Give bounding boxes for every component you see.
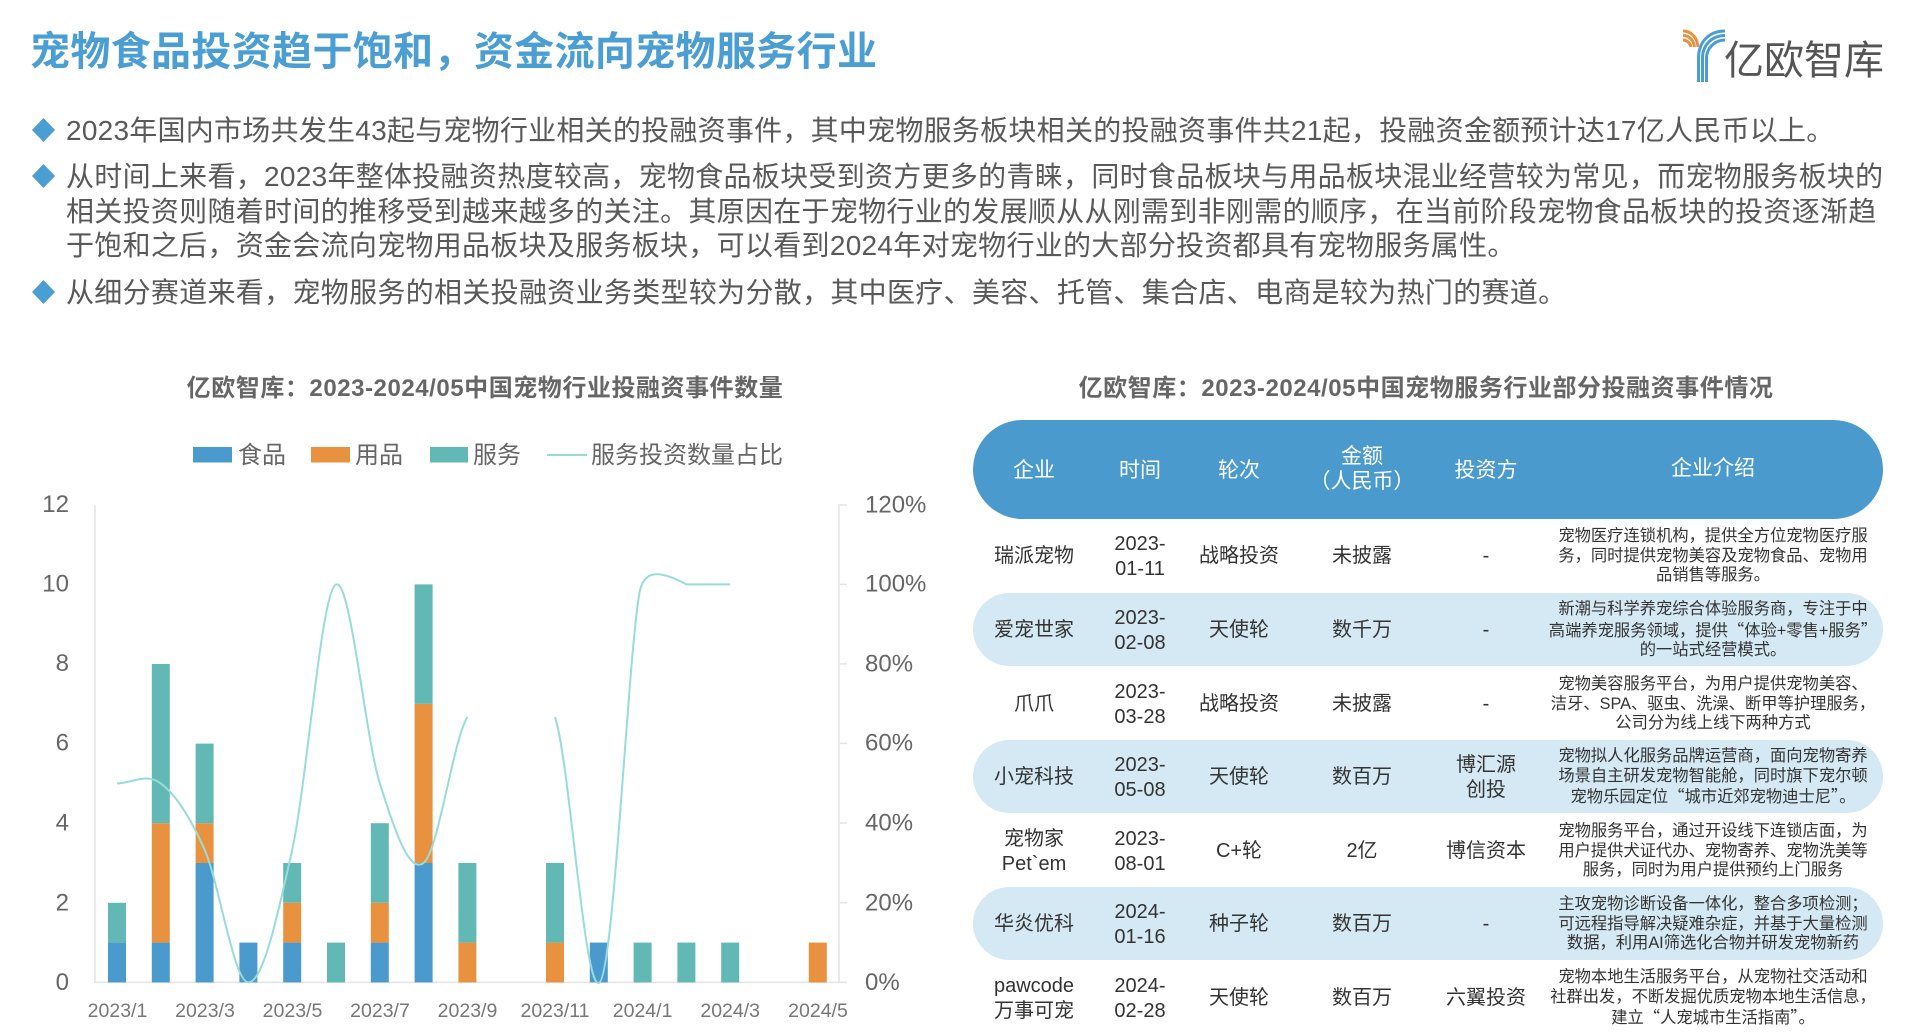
table header: 金额 bbox=[1341, 444, 1383, 468]
row: 小宠科技 bbox=[973, 740, 1883, 813]
row: pawcode 万事可宠 bbox=[994, 968, 1876, 1028]
icon: brand logo mark bbox=[1683, 30, 1725, 82]
row: 瑞派宠物 bbox=[994, 526, 1868, 584]
row: 瑞派宠物: 2023- bbox=[1114, 532, 1166, 554]
table header: （人民币） bbox=[1310, 470, 1414, 492]
x axis labels: 2024/1 bbox=[613, 1000, 672, 1022]
row: 宠物家: 博信资本 bbox=[1446, 840, 1526, 862]
bullet text 2 bbox=[66, 161, 1883, 261]
row: 华炎优科: 可远程指导解决疑难杂症，并基于大量检测 bbox=[1558, 915, 1868, 933]
table header: 轮次 bbox=[1218, 458, 1260, 482]
row: 瑞派宠物: 务，同时提供宠物美容及宠物食品、宠物用 bbox=[1558, 547, 1868, 565]
row: 爱宠世家: 数千万 bbox=[1332, 619, 1392, 641]
row: 爪爪: 未披露 bbox=[1332, 693, 1392, 715]
row: 华炎优科: 数据，利用AI筛选化合物并研发宠物新药 bbox=[1567, 934, 1859, 952]
chart legend: 食品 bbox=[238, 442, 286, 469]
right axis labels: 60% bbox=[865, 730, 913, 756]
row: 小宠科技: 数百万 bbox=[1332, 766, 1392, 788]
row: 宠物家: 用户提供犬证代办、宠物寄养、宠物洗美等 bbox=[1558, 842, 1868, 860]
row: 宠物家: C+轮 bbox=[1216, 840, 1262, 862]
row: pawcode 万事可宠: pawcode bbox=[994, 974, 1074, 996]
row: 爱宠世家: 新潮与科学养宠综合体验服务商，专注于中 bbox=[1558, 600, 1868, 618]
row: 爪爪: 2023- bbox=[1114, 680, 1166, 702]
row: 宠物家: 2023- bbox=[1114, 828, 1166, 850]
row: 瑞派宠物: - bbox=[1483, 545, 1489, 567]
bars: food bbox=[108, 863, 608, 982]
row: 华炎优科: 2024- bbox=[1114, 900, 1166, 922]
row: 小宠科技: 宠物乐园定位“城市近郊宠物迪士尼”。 bbox=[1570, 783, 1855, 807]
left axis labels bbox=[42, 491, 69, 996]
right axis labels: 20% bbox=[865, 890, 913, 916]
bars: supplies bbox=[152, 704, 827, 982]
left axis labels: 2 bbox=[56, 890, 69, 916]
row: pawcode 万事可宠: 万事可宠 bbox=[994, 1000, 1074, 1022]
row: 宠物家: 宠物家 bbox=[1004, 828, 1064, 850]
table header: 企业 bbox=[1013, 458, 1055, 482]
left axis labels: 6 bbox=[56, 730, 69, 756]
chart legend: 服务 bbox=[473, 442, 521, 469]
chart: monthly investment events bbox=[42, 442, 926, 1022]
left axis labels: 12 bbox=[42, 491, 69, 518]
bullet text 2: 相关投资则随着时间的推移受到越来越多的关注。其原因在于宠物行业的发展顺从从刚需到非刚需的顺序，在当前阶段宠物食品板块的投资逐渐趋 bbox=[66, 196, 1877, 226]
row: 小宠科技: 场景自主研发宠物智能舱，同时旗下宠尔顿 bbox=[1558, 767, 1868, 785]
table header bbox=[973, 420, 1883, 519]
row: 爱宠世家: 高端养宠服务领域，提供“体验+零售+服务” bbox=[1549, 617, 1877, 641]
x axis labels: 2024/3 bbox=[700, 1000, 760, 1022]
row: 爱宠世家: 的一站式经营模式。 bbox=[1640, 641, 1786, 659]
row: 爪爪: 洁牙、SPA、驱虫、洗澡、断甲等护理服务， bbox=[1551, 695, 1875, 713]
row: 宠物家 bbox=[1002, 822, 1868, 879]
x axis labels bbox=[88, 1000, 848, 1022]
row: 爪爪: - bbox=[1483, 693, 1489, 715]
right axis labels: 0% bbox=[865, 969, 900, 996]
row: 瑞派宠物: 01-11 bbox=[1115, 558, 1165, 580]
row: pawcode 万事可宠: 六翼投资 bbox=[1446, 987, 1526, 1009]
line: service share of investments bbox=[117, 574, 730, 983]
row: 华炎优科: - bbox=[1483, 913, 1489, 935]
table header: 企业介绍 bbox=[1671, 457, 1755, 480]
row: 华炎优科: 种子轮 bbox=[1209, 913, 1269, 935]
right axis labels: 100% bbox=[865, 570, 926, 598]
row: 小宠科技: 创投 bbox=[1466, 778, 1506, 800]
icon: bullet diamond 2 bbox=[32, 164, 55, 188]
row: 小宠科技: 05-08 bbox=[1114, 778, 1166, 800]
logo wordmark: 亿欧智库 bbox=[1724, 39, 1884, 83]
chart legend bbox=[193, 442, 783, 469]
table header: 投资方 bbox=[1454, 458, 1518, 482]
row: pawcode 万事可宠: 社群出发，不断发掘优质宠物本地生活信息， bbox=[1550, 988, 1876, 1006]
bullet list bbox=[32, 115, 1883, 308]
row: 宠物家: 服务，同时为用户提供预约上门服务 bbox=[1583, 861, 1843, 879]
x axis labels: 2023/7 bbox=[350, 1000, 410, 1022]
row: 小宠科技: 小宠科技 bbox=[994, 766, 1074, 788]
right axis labels: 40% bbox=[865, 810, 913, 836]
x axis labels: 2023/3 bbox=[175, 1000, 235, 1022]
bars: services bbox=[108, 584, 739, 982]
row: 爪爪: 03-28 bbox=[1114, 706, 1166, 728]
row: pawcode 万事可宠: 2024- bbox=[1114, 974, 1166, 996]
row: 宠物家: 宠物服务平台，通过开设线下连锁店面，为 bbox=[1558, 822, 1868, 840]
table header: 时间 bbox=[1119, 458, 1161, 482]
row: pawcode 万事可宠: 天使轮 bbox=[1209, 987, 1269, 1009]
bullet text 3: 从细分赛道来看，宠物服务的相关投融资业务类型较为分散，其中医疗、美容、托管、集合店、电商是较为热门的赛道。 bbox=[66, 277, 1566, 308]
row: 爪爪: 宠物美容服务平台，为用户提供宠物美容、 bbox=[1558, 675, 1868, 693]
x axis labels: 2023/1 bbox=[88, 1000, 147, 1022]
row: 小宠科技: 博汇源 bbox=[1456, 754, 1516, 776]
chart heading: 亿欧智库：2023-2024/05中国宠物行业投融资事件数量 bbox=[187, 375, 783, 402]
row: 爱宠世家: 爱宠世家 bbox=[994, 619, 1074, 641]
title: 宠物食品投资趋于饱和，资金流向宠物服务行业 bbox=[30, 30, 877, 74]
row: 华炎优科: 01-16 bbox=[1114, 926, 1166, 948]
x axis labels: 2024/5 bbox=[788, 1000, 848, 1022]
left axis labels: 4 bbox=[56, 810, 69, 836]
left axis labels: 8 bbox=[56, 650, 69, 677]
row: pawcode 万事可宠: 02-28 bbox=[1114, 1000, 1166, 1022]
chart legend: 服务投资数量占比 bbox=[591, 442, 783, 469]
right axis labels: 120% bbox=[865, 492, 926, 518]
row: 华炎优科: 华炎优科 bbox=[994, 913, 1074, 935]
row: 瑞派宠物: 宠物医疗连锁机构，提供全方位宠物医疗服 bbox=[1558, 527, 1868, 545]
bullet text 1: 2023年国内市场共发生43起与宠物行业相关的投融资事件，其中宠物服务板块相关的投融资事件共21起，投融资金额预计达17亿人民币以上。 bbox=[66, 115, 1834, 146]
row: pawcode 万事可宠: 数百万 bbox=[1332, 987, 1392, 1009]
row: 爪爪: 战略投资 bbox=[1199, 693, 1279, 715]
row: 瑞派宠物: 未披露 bbox=[1332, 545, 1392, 567]
row: 华炎优科: 数百万 bbox=[1332, 913, 1392, 935]
row: pawcode 万事可宠: 建立“人宠城市生活指南”。 bbox=[1611, 1004, 1815, 1028]
row: 瑞派宠物: 瑞派宠物 bbox=[994, 545, 1074, 567]
row: 瑞派宠物: 品销售等服务。 bbox=[1656, 566, 1770, 584]
row: 爱宠世家: 2023- bbox=[1114, 606, 1166, 628]
row: 爱宠世家 bbox=[973, 593, 1883, 666]
table heading: 亿欧智库：2023-2024/05中国宠物服务行业部分投融资事件情况 bbox=[1079, 375, 1773, 402]
row: 宠物家: 08-01 bbox=[1114, 852, 1166, 874]
chart legend: 用品 bbox=[355, 442, 403, 469]
row: 爪爪: 公司分为线上线下两种方式 bbox=[1615, 714, 1811, 732]
row: 爱宠世家: - bbox=[1483, 619, 1489, 641]
row: 爱宠世家: 02-08 bbox=[1114, 632, 1166, 654]
row: 瑞派宠物: 战略投资 bbox=[1199, 545, 1279, 567]
table: investment events bbox=[973, 420, 1883, 1028]
icon: bullet diamond 1 bbox=[32, 118, 55, 142]
row: 华炎优科 bbox=[973, 887, 1883, 960]
right axis labels: 80% bbox=[865, 650, 913, 678]
row: 小宠科技: 2023- bbox=[1114, 754, 1166, 776]
bullet text 2: 从时间上来看，2023年整体投融资热度较高，宠物食品板块受到资方更多的青睐，同时食品板块与用品板块混业经营较为常见，而宠物服务板块的 bbox=[66, 161, 1883, 192]
x axis labels: 2023/5 bbox=[263, 1000, 322, 1022]
row: 小宠科技: 天使轮 bbox=[1209, 766, 1269, 788]
bullet text 2: 于饱和之后，资金会流向宠物用品板块及服务板块，可以看到2024年对宠物行业的大部分投资都具有宠物服务属性。 bbox=[66, 230, 1516, 261]
x axis labels: 2023/9 bbox=[438, 1000, 497, 1022]
row: 小宠科技: 宠物拟人化服务品牌运营商，面向宠物寄养 bbox=[1558, 747, 1868, 765]
icon: bullet diamond 3 bbox=[32, 280, 55, 304]
x axis labels: 2023/11 bbox=[520, 1000, 590, 1022]
row: 宠物家: Pet`em bbox=[1002, 852, 1066, 874]
right axis labels bbox=[865, 492, 926, 996]
row: pawcode 万事可宠: 宠物本地生活服务平台，从宠物社交活动和 bbox=[1558, 968, 1868, 986]
row: 爱宠世家: 天使轮 bbox=[1209, 619, 1269, 641]
row: 华炎优科: 主攻宠物诊断设备一体化，整合多项检测； bbox=[1558, 895, 1868, 913]
left axis labels: 10 bbox=[42, 570, 69, 598]
row: 爪爪 bbox=[1014, 674, 1875, 732]
row: 宠物家: 2亿 bbox=[1346, 840, 1378, 862]
left axis labels: 0 bbox=[56, 969, 69, 996]
row: 爪爪: 爪爪 bbox=[1014, 693, 1054, 715]
